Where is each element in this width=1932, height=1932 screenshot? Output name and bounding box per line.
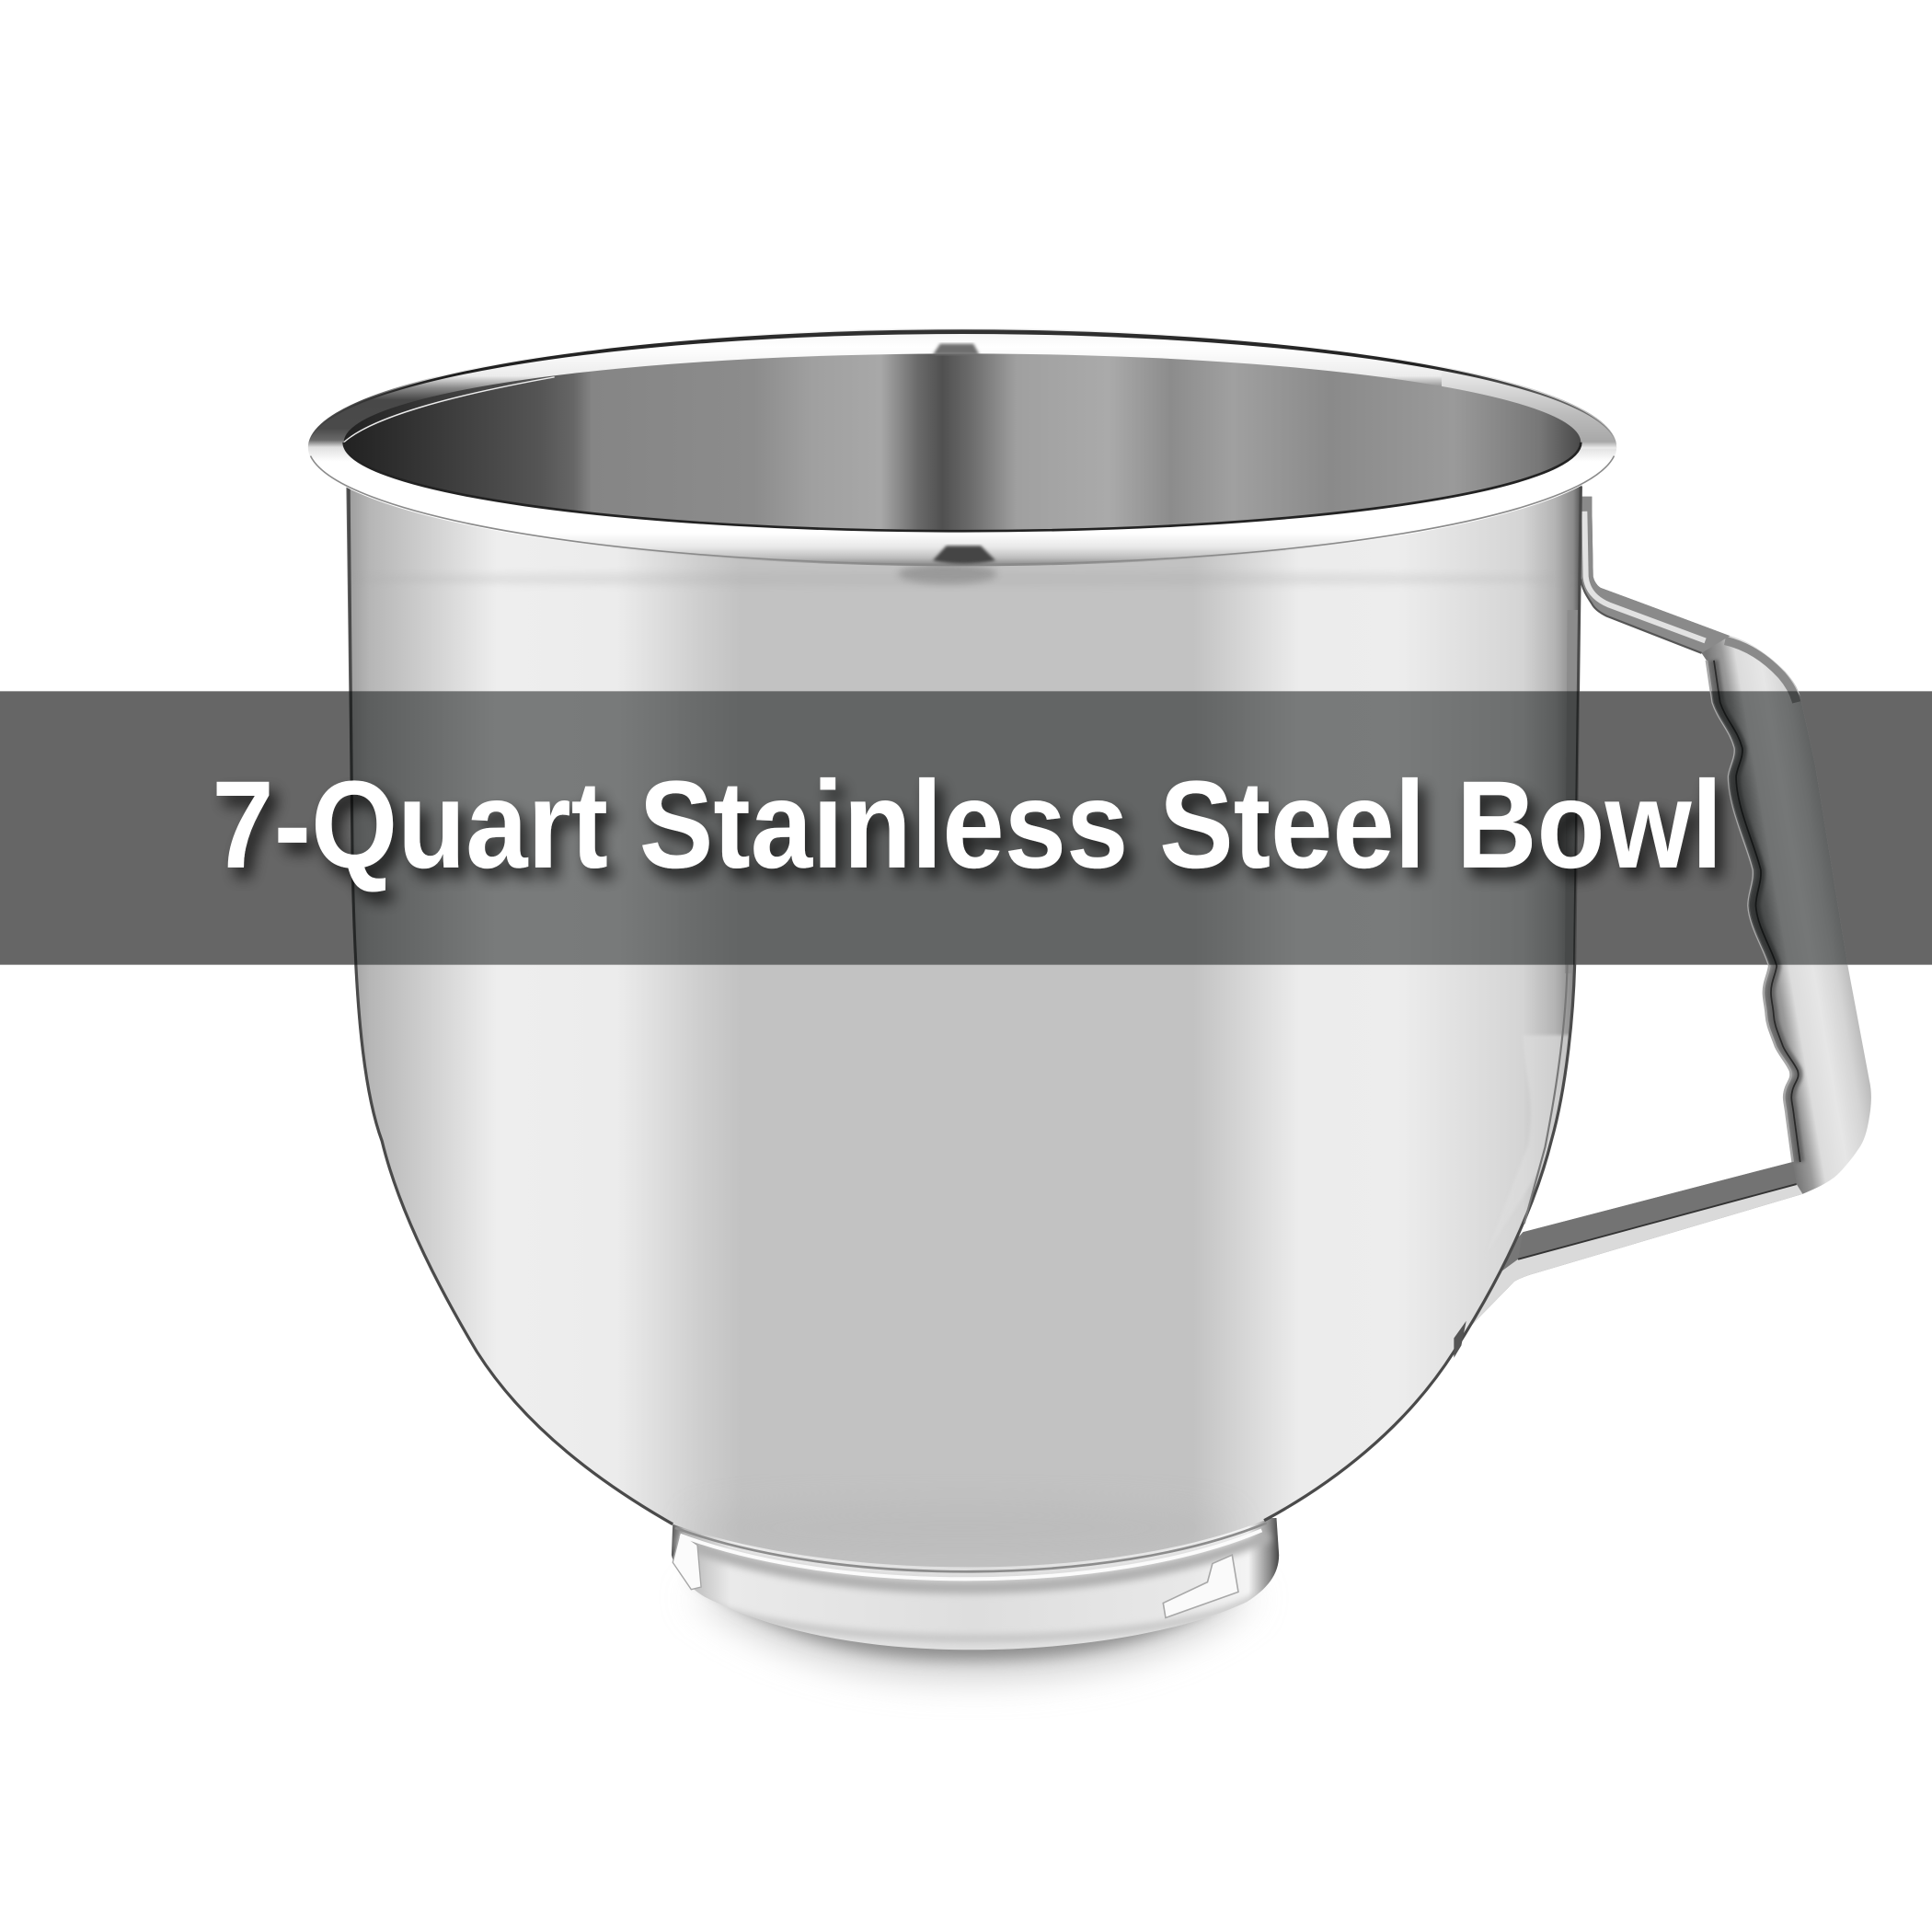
upper strap lower edge bbox=[1581, 579, 1702, 653]
right lug bbox=[1163, 1555, 1238, 1617]
grip wave shading bbox=[1714, 661, 1800, 1162]
upper strap bbox=[1581, 497, 1730, 653]
bowl interior bbox=[344, 353, 1581, 531]
upper strap highlight bbox=[1584, 512, 1706, 640]
grip crease bbox=[1714, 661, 1800, 1162]
body base shading bbox=[346, 480, 1582, 1567]
front rim lower edge bbox=[311, 456, 1614, 565]
handle bbox=[1454, 497, 1871, 1330]
bowl rim bbox=[308, 328, 1616, 566]
rim outer dark top edge bbox=[308, 329, 1616, 449]
handle silhouette and grip bbox=[1454, 497, 1871, 1330]
band tint over bowl bbox=[349, 691, 1847, 965]
foot band bbox=[672, 1518, 1279, 1650]
bowl illustration bbox=[308, 328, 1871, 1679]
bowl body bbox=[345, 480, 1582, 1579]
inner reflected edge line bbox=[1524, 965, 1568, 1224]
interior brushed steel bbox=[344, 353, 1581, 531]
interior bottom dark edge bbox=[344, 443, 1581, 531]
grip wave edge bbox=[1707, 661, 1793, 1162]
dark translucent title band bbox=[0, 691, 1932, 965]
lower strap dark inner face bbox=[1518, 1162, 1797, 1259]
seam ring bbox=[675, 1523, 1267, 1571]
floor shadow bbox=[690, 1575, 1257, 1679]
rim reflection marks bbox=[933, 344, 995, 564]
lower strap seam bbox=[1518, 1184, 1797, 1259]
seam highlight bbox=[680, 1530, 1261, 1579]
lower strap light edge bbox=[1454, 1184, 1802, 1330]
left lug bbox=[673, 1533, 701, 1590]
foot shading bbox=[678, 1535, 1269, 1639]
grip top edge bbox=[1725, 640, 1797, 702]
right corner shading bbox=[1442, 378, 1616, 449]
body dark edge bbox=[349, 487, 1581, 1524]
body soft reflections bbox=[345, 564, 1581, 1553]
rim body bbox=[308, 328, 1616, 566]
product image canvas bbox=[0, 328, 1932, 1695]
base foot ring bbox=[672, 1518, 1279, 1650]
bottom fastening tab bbox=[1454, 1321, 1466, 1358]
interior top-left highlight edge bbox=[344, 377, 555, 443]
title: 7-Quart Stainless Steel Bowl bbox=[212, 755, 1722, 894]
